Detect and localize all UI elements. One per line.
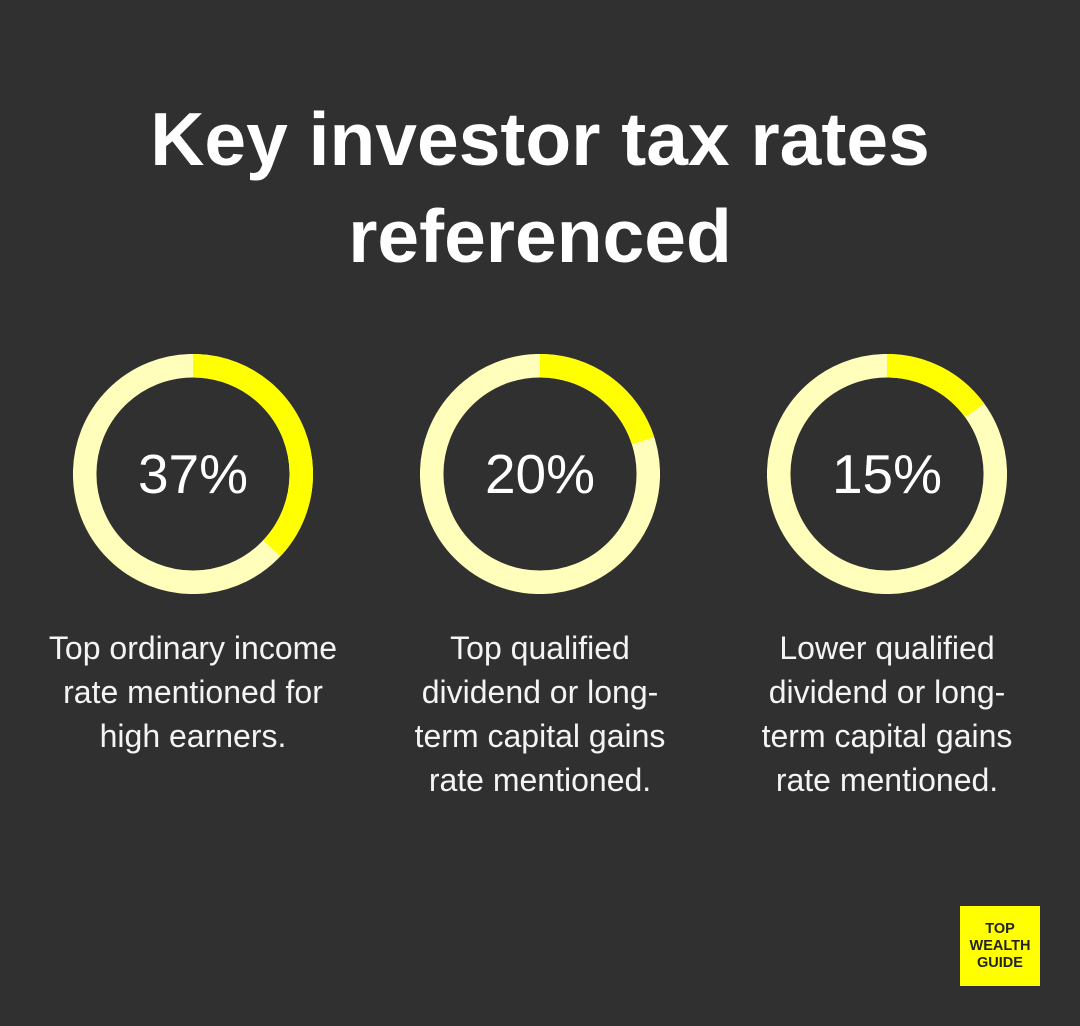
title	[150, 97, 930, 278]
description: 20%	[415, 630, 665, 798]
description: 20%: term capital gains	[415, 718, 665, 754]
description: 15%: term capital gains	[762, 718, 1012, 754]
donut: 20%	[420, 354, 660, 594]
description: 37%	[49, 630, 337, 754]
logo: WEALTH	[970, 938, 1030, 954]
logo: TOP	[985, 920, 1015, 936]
description: 15%: dividend or long-	[769, 674, 1005, 710]
donut: 15%	[767, 354, 1007, 594]
description: 37%: Top ordinary income	[49, 630, 337, 666]
logo: GUIDE	[977, 954, 1023, 970]
donut: 37%: 37%	[138, 443, 248, 505]
title: Key investor tax rates	[150, 97, 930, 181]
description: 37%: rate mentioned for	[63, 674, 323, 710]
title: referenced	[348, 194, 732, 278]
description: 15%	[762, 630, 1012, 798]
description: 15%: Lower qualified	[779, 630, 995, 666]
description: 37%: high earners.	[100, 718, 286, 754]
donut: 15%: 15%	[832, 443, 942, 505]
logo	[960, 906, 1040, 986]
donut: 37%	[73, 354, 313, 594]
donut: 20%: 20%	[485, 443, 595, 505]
description: 20%: Top qualified	[450, 630, 630, 666]
description: 15%: rate mentioned.	[776, 762, 998, 798]
description: 20%: dividend or long-	[422, 674, 658, 710]
description: 20%: rate mentioned.	[429, 762, 651, 798]
